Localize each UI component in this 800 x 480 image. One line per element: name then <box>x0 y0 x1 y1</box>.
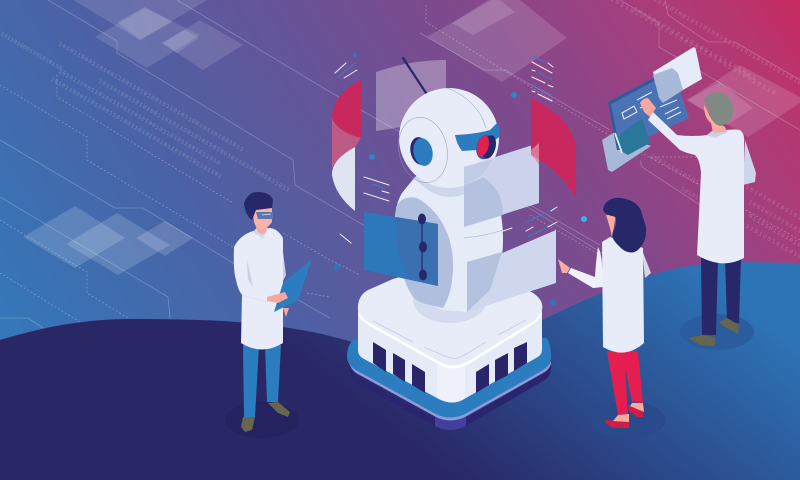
head <box>606 215 616 237</box>
collar and neck <box>253 224 268 239</box>
translucent diamonds top right <box>427 0 800 137</box>
tablet <box>274 259 312 312</box>
rear sleeve <box>743 140 756 185</box>
robot base <box>347 262 551 430</box>
coat <box>234 228 283 350</box>
circuit lines <box>0 0 800 328</box>
base white rim <box>358 310 542 368</box>
legs <box>243 345 259 417</box>
floating card front <box>653 47 702 102</box>
hair <box>244 192 273 220</box>
shadow <box>591 401 665 439</box>
scientist left <box>225 192 312 438</box>
left eye <box>408 135 432 167</box>
right eye <box>474 133 496 161</box>
holographic dashes <box>335 56 557 243</box>
binary text streams <box>0 0 800 261</box>
ground hills <box>0 262 800 480</box>
hands <box>267 292 289 317</box>
base shadow post <box>435 410 466 430</box>
neck and face <box>704 105 727 133</box>
face plate arc <box>393 113 453 187</box>
legs <box>701 258 718 335</box>
visor <box>455 123 500 151</box>
scientist right <box>602 47 756 350</box>
headset visor <box>256 212 273 219</box>
holo panel back grey <box>376 60 446 131</box>
shadow <box>225 402 299 438</box>
head hair <box>704 92 733 126</box>
arm <box>568 247 603 288</box>
scientist centre woman <box>558 198 665 439</box>
antenna <box>403 58 426 93</box>
base body sides <box>358 312 542 402</box>
coat creases <box>242 260 268 302</box>
binary text streams: 1011010011010100110101100101011010010110101001011011 <box>97 78 291 194</box>
translucent diamonds left <box>23 206 193 275</box>
base blue plate <box>347 330 551 418</box>
robot body <box>395 168 503 312</box>
shadow <box>680 314 754 350</box>
shoes <box>241 417 255 432</box>
coat <box>602 237 644 353</box>
coat <box>648 112 744 263</box>
binary text streams: 1011010001101010110 <box>0 31 63 72</box>
holo panel right lower <box>467 230 556 312</box>
hand <box>640 98 656 117</box>
holo panel back left red <box>332 80 361 211</box>
hair <box>603 198 646 253</box>
data dots <box>334 53 587 306</box>
binary text streams: 10101 <box>679 186 700 202</box>
holo panel front blue with chain <box>364 212 438 286</box>
binary text streams: 10101100011011001101001101010010110100101101101 <box>49 76 223 180</box>
holo panel pink overlap <box>531 143 539 165</box>
holo panel right upper <box>464 143 539 227</box>
legs <box>607 351 643 415</box>
rear sleeve <box>281 236 286 285</box>
book panel teal <box>617 118 650 155</box>
floating card back <box>602 132 651 172</box>
hand <box>558 259 570 273</box>
binary text streams: 101011000110100110011010100101101011001011010 <box>57 68 222 167</box>
binary text streams: 100101010101 <box>649 153 700 186</box>
translucent diamonds top left <box>73 0 243 70</box>
binary text streams: 10101100011010011001101010010110101100101101001011 <box>57 41 245 153</box>
collar <box>707 129 728 138</box>
tablet text lines <box>622 92 681 119</box>
vents <box>373 342 527 393</box>
binary text streams: 10110100101101001011101001 <box>632 6 757 82</box>
robot neck shadow on base <box>413 277 487 323</box>
base top engraved lines <box>373 320 526 358</box>
shoes <box>605 420 629 428</box>
rear sleeve <box>642 250 651 278</box>
holo panel red right <box>531 98 576 198</box>
face <box>252 206 272 230</box>
robot head <box>393 88 500 188</box>
shoes <box>688 335 715 346</box>
base top <box>358 262 542 366</box>
floating tablet <box>608 68 689 150</box>
